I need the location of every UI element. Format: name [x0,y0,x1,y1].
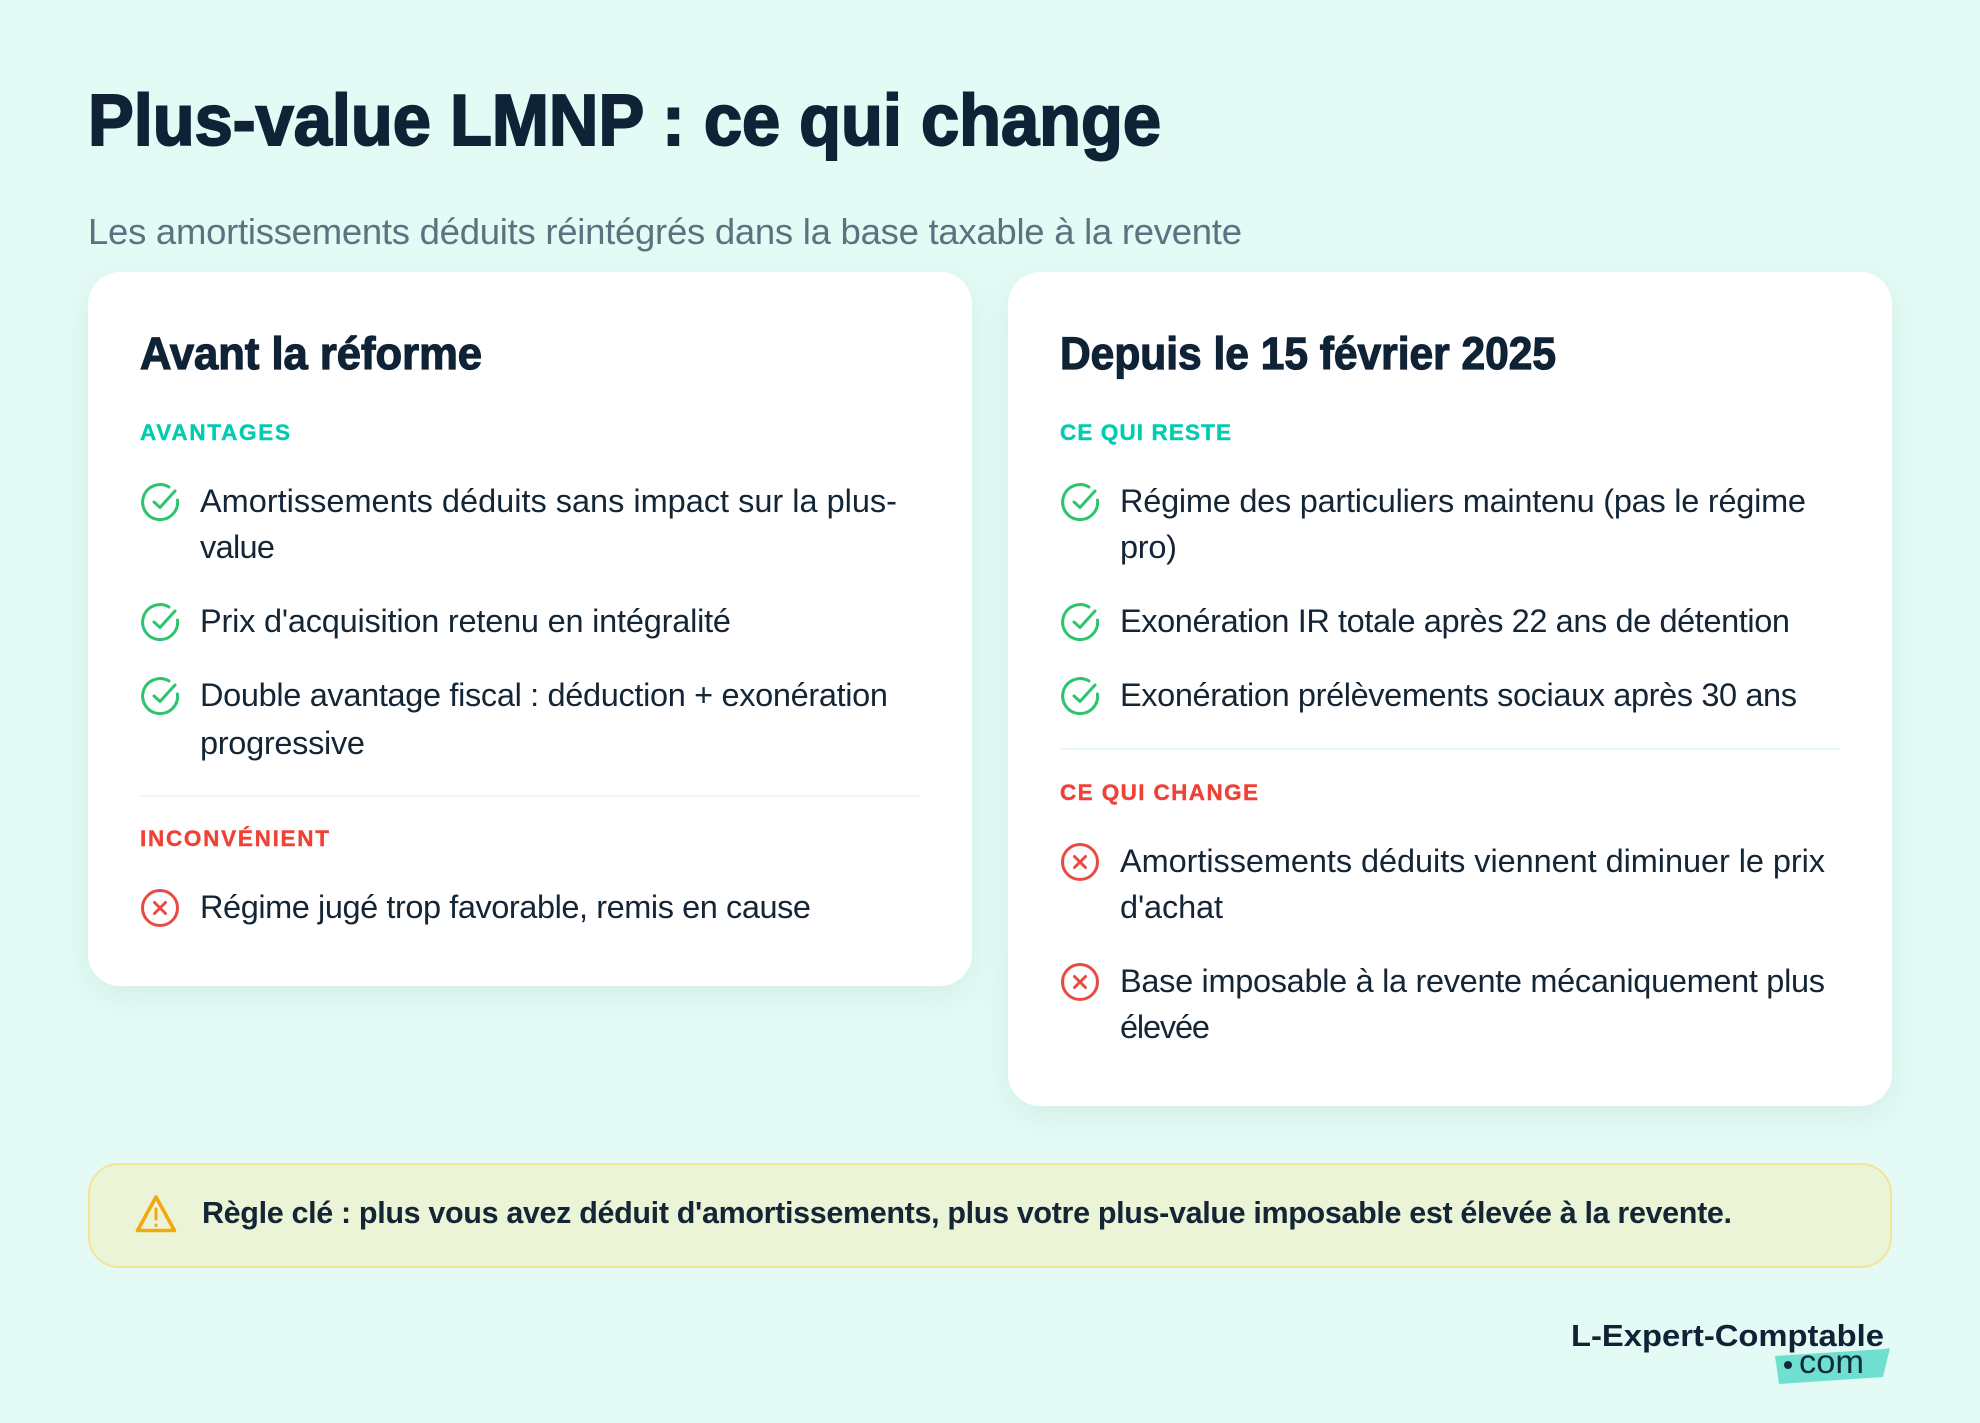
label: avantages: AVANTAGES [140,420,290,445]
item: amortissements [143,483,897,565]
heading: Depuis le 15 février 2025 [1060,328,1556,379]
label: ce qui reste: CE QUI RESTE [1060,420,1231,445]
item: amortissements: Amortissements déduits sans impact sur la plus- [200,483,897,519]
item: amortissements: value [200,529,275,565]
icon: warning triangle [138,1197,174,1230]
item: prix d'acquisition: Prix d'acquisition retenu en intégralité [200,603,731,639]
logo: L-Expert-Comptable.com [1571,1319,1890,1384]
item: amortissements déduits: Amortissements déduits viennent diminuer le prix [1120,843,1825,879]
item: amortissements déduits: d'achat [1120,889,1223,925]
item: régime des particuliers: pro) [1120,529,1177,565]
item: base imposable: élevée [1120,1009,1210,1045]
item: exonération IR: Exonération IR totale après 22 ans de détention [1120,603,1790,639]
logo: L-Expert-Comptable.com: com [1799,1343,1864,1380]
callout: règle clé [89,1164,1891,1267]
label: inconvénient: INCONVÉNIENT [140,826,329,851]
item: double avantage [143,677,888,761]
panel: avant la réforme [88,272,972,986]
item: amortissements déduits [1062,843,1825,925]
label: ce qui change: CE QUI CHANGE [1060,780,1258,805]
item: base imposable: Base imposable à la revente mécaniquement plus [1120,963,1825,999]
panel: depuis le 15 février 2025 [1008,272,1892,1106]
item: base imposable [1062,963,1825,1045]
title: Plus-value LMNP : ce qui change [88,81,1161,161]
subtitle: Les amortissements déduits réintégrés dans la base taxable à la revente [88,211,1242,252]
item: double avantage: Double avantage fiscal : déduction + exonération [200,677,888,713]
item: régime jugé: Régime jugé trop favorable, remis en cause [200,889,811,925]
item: exonération prélèvements: Exonération prélèvements sociaux après 30 ans [1120,677,1797,713]
heading: Avant la réforme [140,328,482,379]
logo: L-Expert-Comptable.com: L-Expert-Comptable [1571,1319,1884,1353]
callout text: Règle clé : plus vous avez déduit d'amortissements, plus votre plus-value imposable est élevée à la revente. [202,1196,1732,1230]
item: régime des particuliers [1063,483,1806,565]
card background [88,272,972,986]
card background [1008,272,1892,1106]
item: régime des particuliers: Régime des particuliers maintenu (pas le régime [1120,483,1806,519]
item: double avantage: progressive [200,725,365,761]
